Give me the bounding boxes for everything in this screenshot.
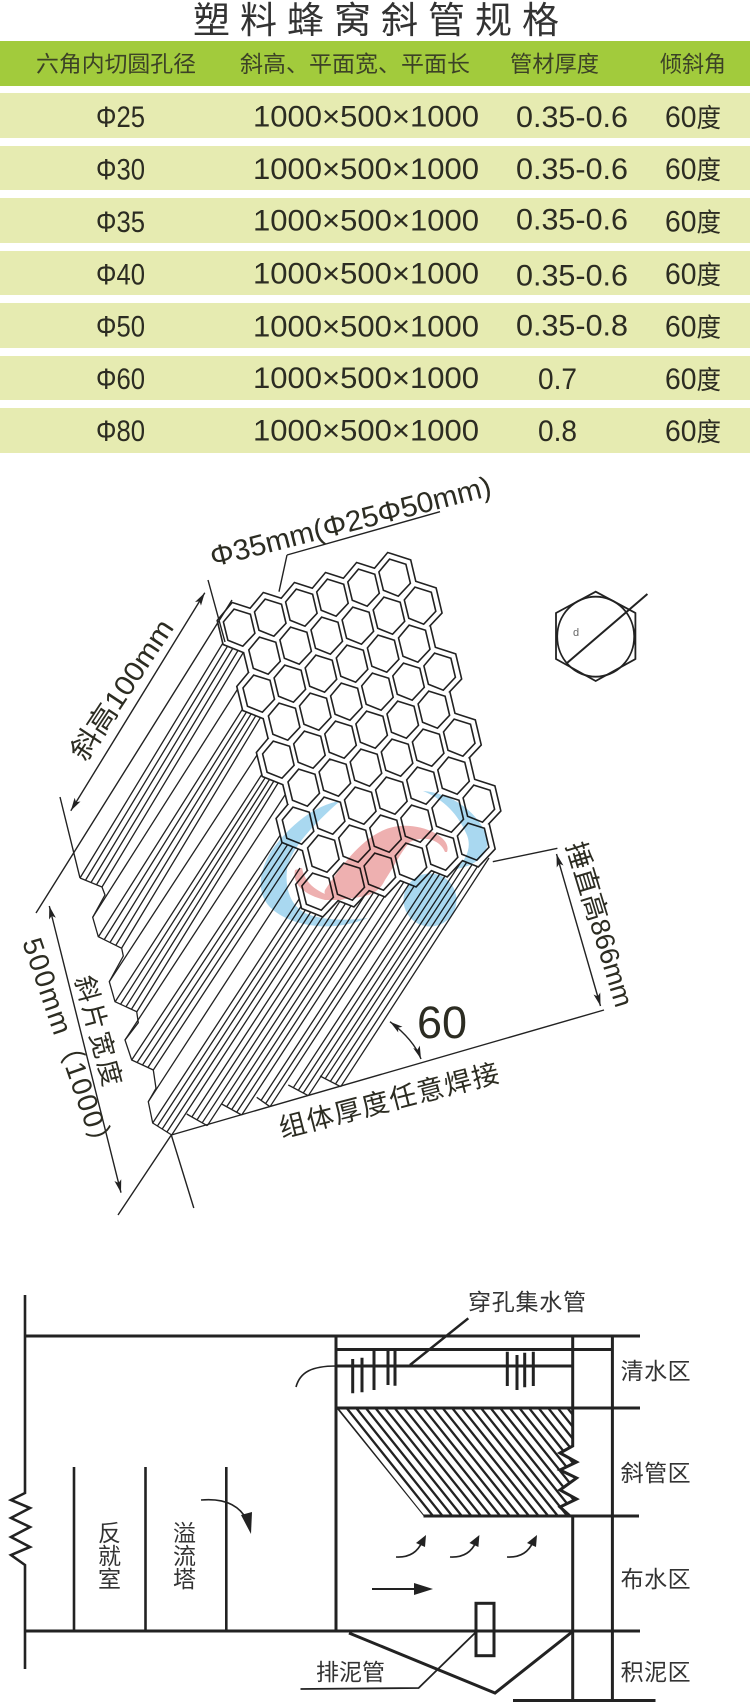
row Φ35: Φ35 [96,206,145,239]
tube body stripes [80,638,489,1135]
row Φ40: 1000×500×1000 [253,258,479,290]
row Φ25: 0.35-0.6 [516,101,628,134]
table header row: 六角内切圆孔径 [36,52,196,77]
arrow: slant width [49,906,121,1193]
table header row: 斜高、平面宽、平面长 [240,52,470,77]
row Φ40 [0,251,750,295]
table header row: 管材厚度 [510,52,599,77]
label: perforated pipe: 穿孔集水管 [468,1289,586,1315]
label: assembly thickness: 组体厚度任意焊接 [276,1058,502,1144]
row Φ40: Φ40 [96,258,145,292]
label: reaction chamber: 就 [98,1543,121,1569]
sludge pipe leader [300,1632,476,1689]
row Φ80: 60度 [665,415,721,448]
label: reaction chamber: 反 [98,1520,121,1546]
row Φ60: 0.7 [538,363,577,396]
row Φ40: 0.35-0.6 [516,260,628,292]
row Φ35: 1000×500×1000 [253,204,479,238]
row Φ60: 1000×500×1000 [253,362,479,395]
arrow: inflow [372,1583,433,1595]
label: distribution zone: 布水区 [621,1566,691,1592]
row Φ50: 60度 [665,310,721,344]
honeycomb tube isometric diagram [16,471,639,1215]
collecting pipe with perforations [296,1318,572,1393]
label: 60: 60 [417,997,467,1048]
arrow: vertical height [556,854,600,1006]
inclined tube hatching [338,1410,574,1516]
arrow: slant height [71,593,205,811]
row Φ50: 1000×500×1000 [253,310,479,344]
row Φ25: 60度 [665,101,721,134]
row Φ30 [0,146,750,190]
row Φ35 [0,198,750,243]
row Φ80: Φ80 [96,415,145,448]
label: vertical height: 捶直高866mm [560,838,639,1011]
row Φ50: 0.35-0.8 [516,310,628,342]
label: plate width: 斜片宽度 [69,972,128,1092]
row Φ60: Φ60 [96,363,145,396]
label: slant height: 斜高100mm [64,614,180,766]
table header row [0,41,750,86]
label: reaction chamber: 室 [98,1566,121,1592]
label: inclined tube zone: 斜管区 [621,1460,691,1486]
row Φ35: 60度 [665,206,721,238]
row Φ30: Φ30 [96,154,145,186]
sedimentation tank schematic [11,1289,691,1702]
row Φ25: 1000×500×1000 [253,100,479,134]
row Φ25: Φ25 [96,101,145,134]
spec table [0,41,750,453]
row Φ80: 1000×500×1000 [253,414,479,448]
label: hole diameter: Φ35mm(Φ25Φ50mm) [207,471,495,574]
label: overflow tower: 塔 [173,1566,196,1592]
label: sludge pipe: 排泥管 [316,1659,385,1685]
title: 塑料蜂窝斜管规格 [193,0,559,41]
row Φ30: 0.35-0.6 [516,153,628,186]
arrows: upward flow [396,1535,537,1557]
row Φ60 [0,356,750,400]
icon: hexagon with inscribed circle [556,592,647,681]
row Φ80: 0.8 [538,415,577,448]
label: sludge zone: 积泥区 [621,1659,691,1685]
label: overflow tower: 溢 [173,1520,196,1546]
row Φ25 [0,93,750,138]
table header row: 倾斜角 [660,52,726,77]
row Φ30: 60度 [665,153,721,186]
arrow: 60 degree arc [390,1022,421,1059]
icon: hexagon with inscribed circle: d [573,627,579,639]
arrow: overflow [201,1500,252,1534]
row Φ50: Φ50 [96,310,145,344]
row Φ80 [0,408,750,453]
label: 500mm: 500mm（1000） [16,934,120,1160]
label: overflow tower: 流 [173,1543,196,1569]
honeycomb face [223,559,495,910]
watermark logo [261,791,487,926]
row Φ50 [0,303,750,348]
label: clear water zone: 清水区 [621,1358,691,1384]
row Φ30: 1000×500×1000 [253,153,479,186]
dimension lines [36,512,604,1215]
row Φ35: 0.35-0.6 [516,204,628,236]
tank structure lines [11,1295,656,1702]
row Φ60: 60度 [665,363,721,396]
row Φ40: 60度 [665,258,721,291]
